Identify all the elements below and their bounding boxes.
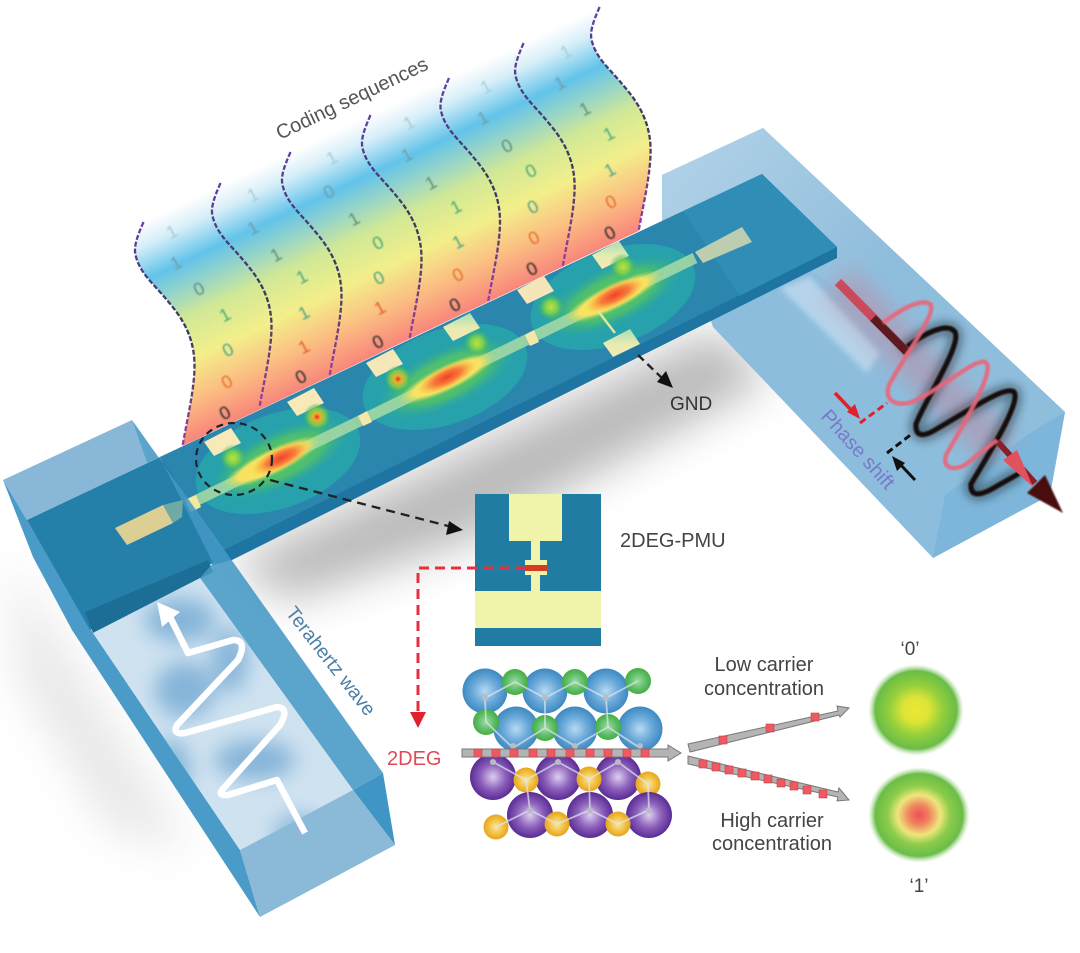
2DEG-PMU unit diagram <box>475 494 601 646</box>
binary digits: 0 <box>369 331 387 353</box>
shadow under board and waveguide <box>10 330 770 850</box>
binary digits: 0 <box>218 371 236 393</box>
dashed arrow to PMU <box>270 480 463 535</box>
label: state 1: ‘1’ <box>909 876 929 897</box>
coding sequence sheet <box>135 7 651 446</box>
binary digits: 0 <box>602 191 620 213</box>
heat map ellipses <box>181 223 710 535</box>
dashed arrow to GND <box>638 355 673 388</box>
binary digits: 1 <box>474 107 492 129</box>
hot cores <box>218 262 667 497</box>
label: state 0: ‘0’ <box>900 639 920 660</box>
binary digits: 1 <box>551 72 569 94</box>
binary digits: 0 <box>522 160 540 182</box>
2DEG channel arrow <box>462 745 681 761</box>
binary digits: 1 <box>576 98 594 120</box>
binary digits: 1 <box>244 217 262 239</box>
binary digits: 1 <box>371 297 389 319</box>
binary digits: 0 <box>292 366 310 388</box>
low carrier arrow <box>688 706 849 752</box>
binary digits: 0 <box>190 278 208 300</box>
barrier layer atoms <box>462 668 662 752</box>
binary digits: 0 <box>216 402 234 424</box>
dashed wave boundaries <box>135 7 651 446</box>
substrate layer atoms <box>470 754 672 840</box>
binary digits: 1 <box>293 266 311 288</box>
output helical wave <box>838 282 1063 513</box>
lattice bonds <box>485 681 649 827</box>
board substrate <box>160 174 837 565</box>
high carrier arrow <box>688 756 849 801</box>
binary digits: 0 <box>449 264 467 286</box>
crystal lattice <box>462 668 672 840</box>
left waveguide <box>3 420 395 917</box>
binary digits: 1 <box>163 221 181 243</box>
label: terahertz wave: Terahertz wave <box>281 603 380 720</box>
state 1 field map <box>868 767 970 863</box>
binary digits: 1 <box>295 302 313 324</box>
label: low carrier concentration: Low carrier <box>715 654 814 676</box>
dashed selection circle <box>196 423 272 495</box>
label: phase shift: Phase shift <box>816 406 899 494</box>
binary digits: 0 <box>601 222 619 244</box>
binary digits: 1 <box>345 208 363 230</box>
propagation rod <box>838 282 1063 513</box>
phase shift markers <box>835 393 915 480</box>
binary digits: 0 <box>498 135 516 157</box>
label: 2DEG: 2DEG <box>387 748 441 770</box>
label: high carrier concentration: High carrier <box>720 810 824 832</box>
binary digits: 0 <box>524 196 542 218</box>
binary digits: 0 <box>320 181 338 203</box>
red dashed arrow to 2DEG <box>410 568 525 728</box>
binary digits: 1 <box>447 196 465 218</box>
heading: coding sequences: Coding sequences <box>273 53 432 145</box>
binary digits: 1 <box>422 172 440 194</box>
label: 2DEG-PMU: 2DEG-PMU <box>620 530 726 552</box>
binary digits: 1 <box>295 336 313 358</box>
binary digits: 1 <box>600 123 618 145</box>
binary digits: 1 <box>477 76 495 98</box>
mottled glass floor <box>145 598 326 855</box>
binary digits: 0 <box>523 258 541 280</box>
binary digits: 0 <box>219 339 237 361</box>
binary digits: 1 <box>398 144 416 166</box>
binary digits: 0 <box>525 227 543 249</box>
terahertz wave arrow <box>157 602 305 833</box>
wave glow <box>838 282 1020 494</box>
binary digits: 1 <box>601 159 619 181</box>
right waveguide <box>662 128 1065 558</box>
binary digits: 0 <box>369 232 387 254</box>
binary digits: 1 <box>400 112 418 134</box>
binary digits <box>163 41 620 424</box>
binary digits: 0 <box>370 267 388 289</box>
binary digits: 1 <box>244 184 262 206</box>
binary digits: 1 <box>267 244 285 266</box>
signal strip with end pads <box>185 227 752 512</box>
binary digits: 1 <box>323 147 341 169</box>
label: GND: GND <box>670 394 712 415</box>
label: low carrier concentration <box>704 654 824 700</box>
phase modulation unit pads <box>204 241 640 472</box>
binary digits: 1 <box>557 41 575 63</box>
binary digits: 1 <box>216 304 234 326</box>
label: high carrier concentration <box>712 810 832 855</box>
binary digits: 1 <box>449 231 467 253</box>
binary digits: 1 <box>167 252 185 274</box>
state 0 field map <box>868 664 964 756</box>
label: low carrier concentration: concentration <box>704 678 824 700</box>
black wave <box>903 328 1020 494</box>
red wave <box>883 302 997 468</box>
binary digits: 0 <box>446 294 464 316</box>
label: high carrier concentration: concentration <box>712 833 832 855</box>
